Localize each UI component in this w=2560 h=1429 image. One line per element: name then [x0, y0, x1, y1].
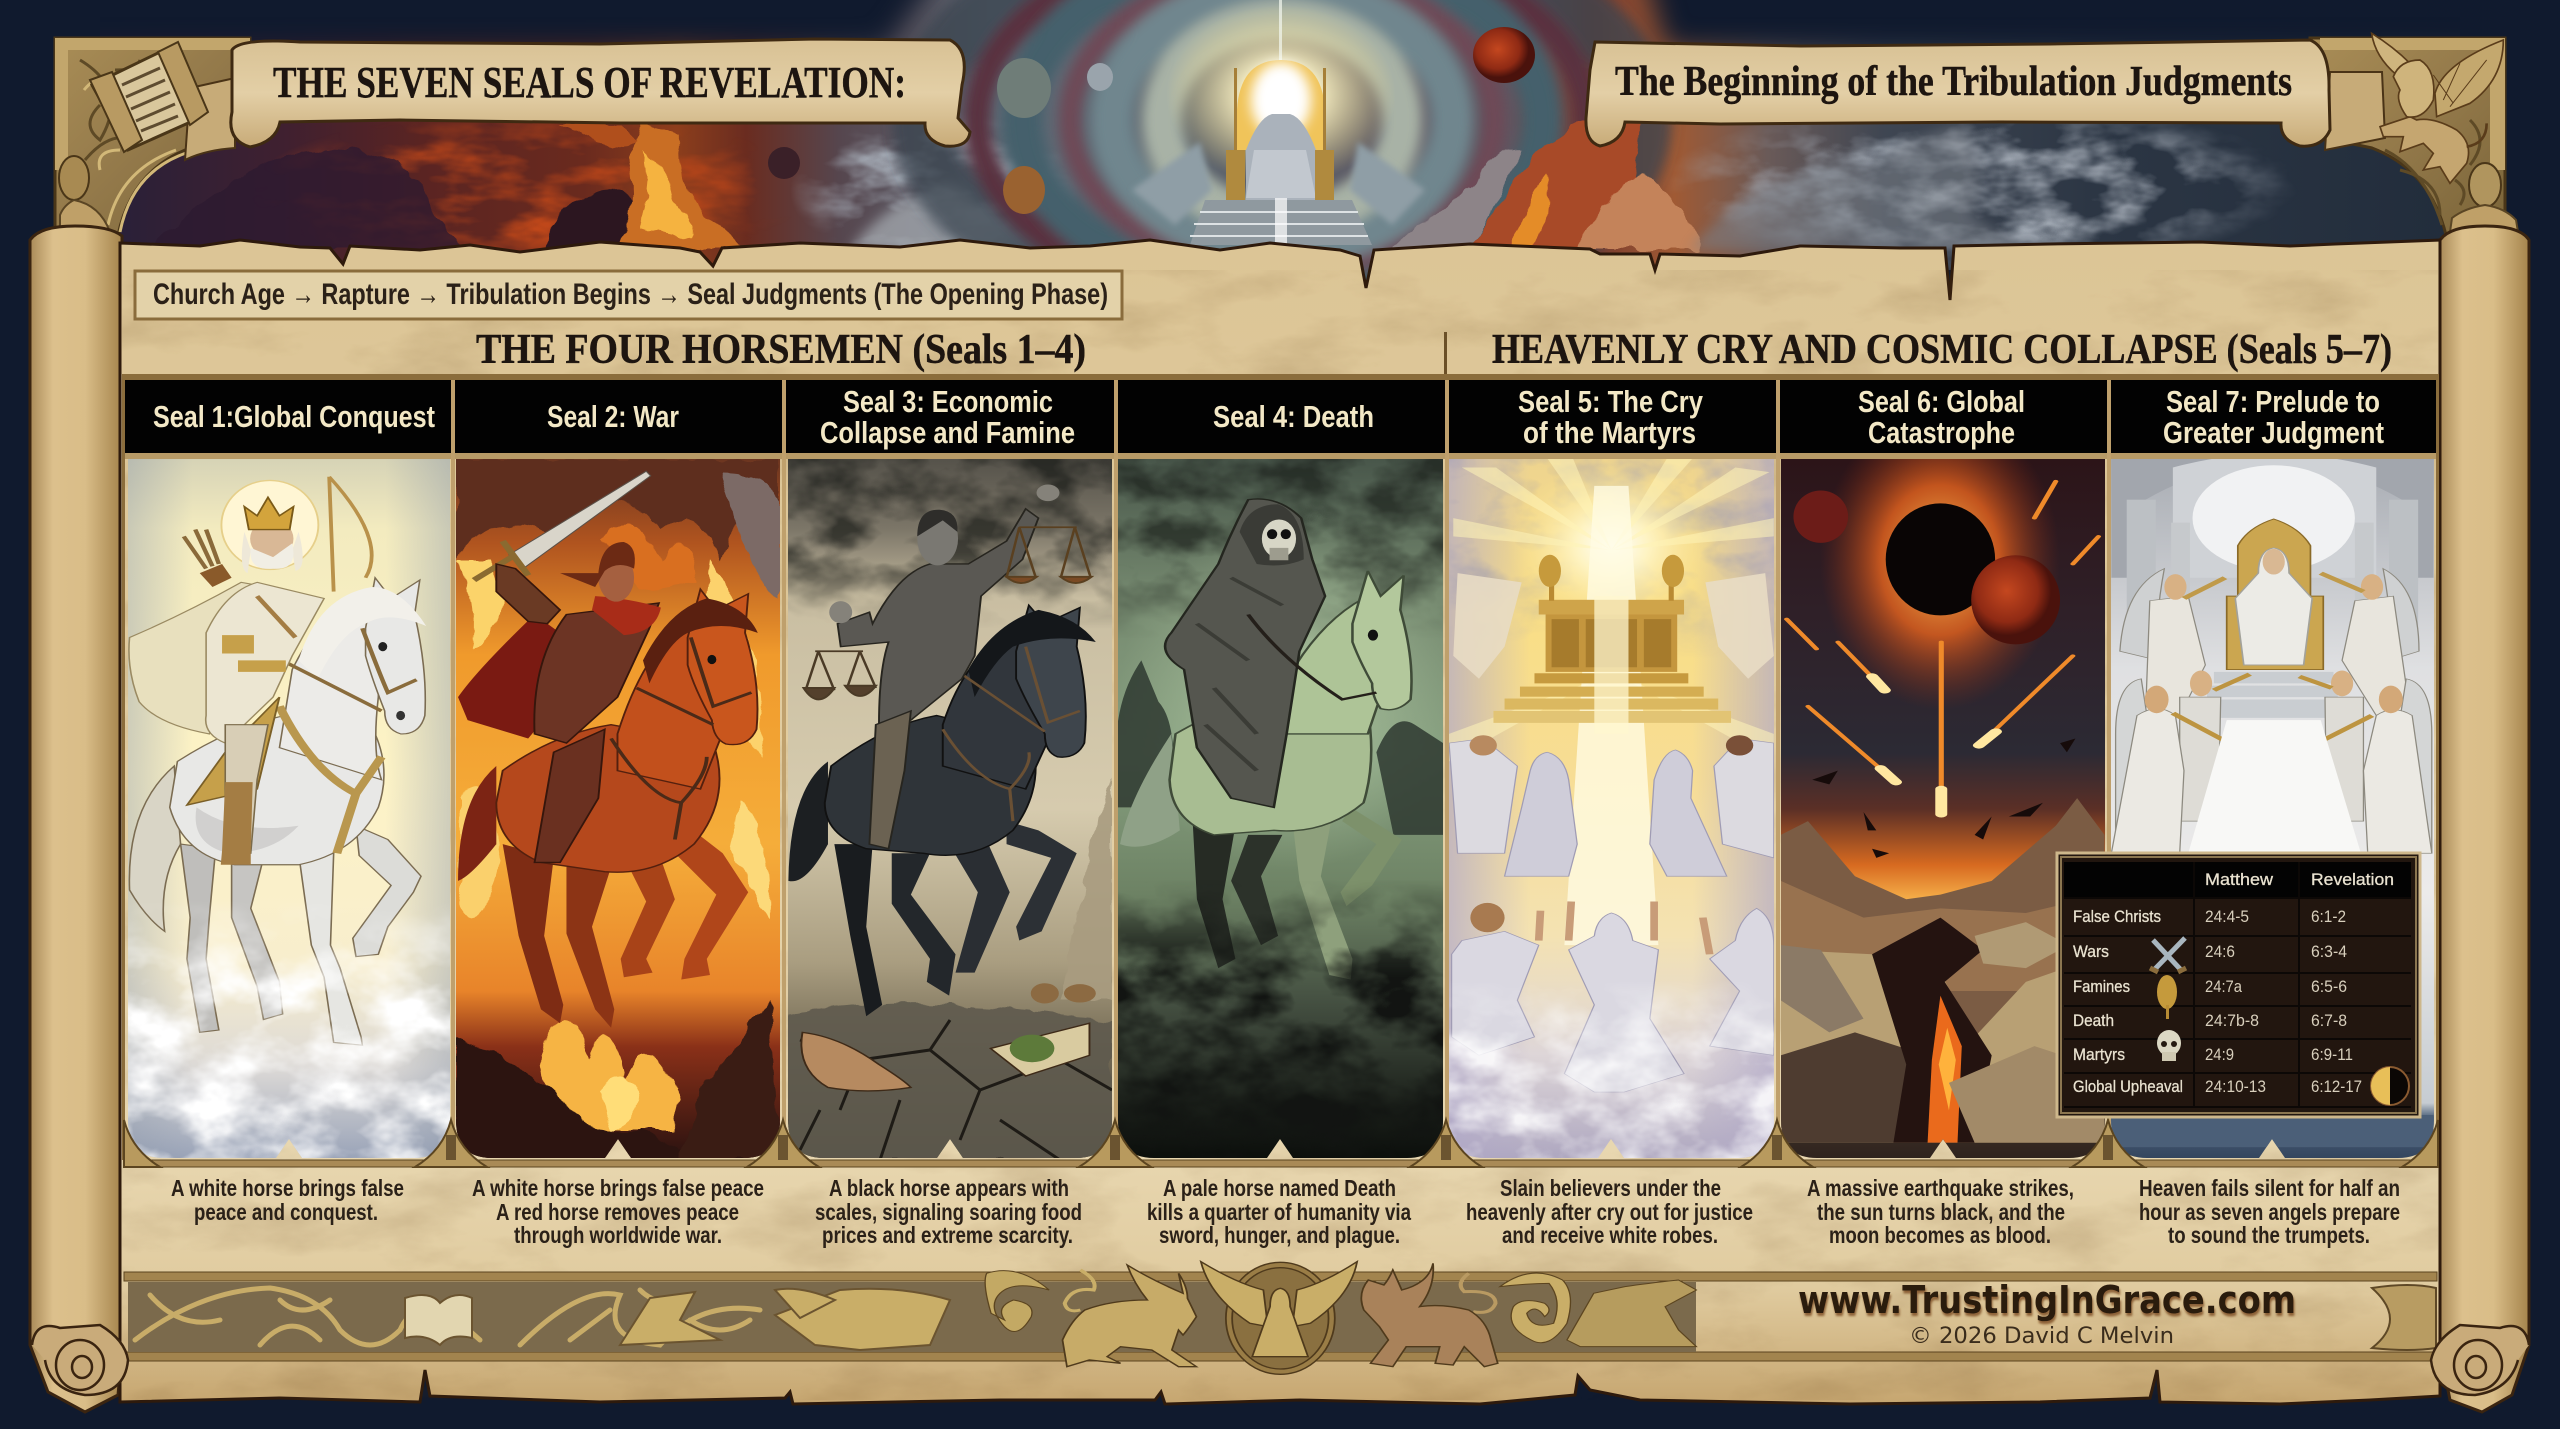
- caption: seal 3: A black horse appears with: [829, 1175, 1069, 1201]
- caption: seal 2: A white horse brings false peace: [472, 1175, 764, 1201]
- column heading: seal 5: Seal 5: The Cry: [1518, 384, 1704, 419]
- copyright: © 2026 David C Melvin: [1909, 1324, 2174, 1349]
- caption: seal 6: the sun turns black, and the: [1817, 1199, 2065, 1225]
- rider with cape and crown: [129, 582, 267, 734]
- caption: seal 7: hour as seven angels prepare: [2139, 1199, 2400, 1225]
- row: global upheaval: Global Upheaval: [2073, 1077, 2183, 1096]
- quiver and arrows: [200, 564, 232, 587]
- row: death: 24:7b-8: [2205, 1011, 2259, 1030]
- column heading: seal 1: Seal 1:Global Conquest: [153, 399, 435, 434]
- balance scales right: [1007, 527, 1091, 583]
- left scroll roller: [30, 226, 122, 1412]
- icon: winged lion: [2372, 33, 2503, 183]
- panel: seal 4 pale horse: [1116, 459, 1460, 1160]
- parchment sheet: [120, 240, 2440, 1404]
- arches and columns: [2111, 458, 2434, 578]
- panel: seal 1 white horse: [128, 459, 450, 1160]
- caption: seal 1: peace and conquest.: [194, 1199, 378, 1225]
- left scroll curl: [32, 1325, 128, 1395]
- white horse: [129, 578, 426, 1045]
- pale horse: [1120, 734, 1180, 847]
- banner tail right: [2325, 72, 2385, 150]
- column heading: seal 6: Seal 6: Global: [1858, 384, 2025, 419]
- caption: seal 2: through worldwide war.: [514, 1222, 722, 1248]
- finial left: [59, 156, 110, 232]
- icon: crossed swords: [2150, 938, 2186, 972]
- phase timeline box: [135, 271, 1122, 319]
- panel: seal 2 red horse: [456, 459, 780, 1160]
- column heading: seal 5: of the Martyrs: [1523, 415, 1696, 450]
- shadow crowd: [1116, 660, 1443, 835]
- lion statue right: [1361, 1263, 1498, 1367]
- kneeling martyrs front row: [1452, 908, 1774, 1092]
- caption: seal 1: A white horse brings false: [171, 1175, 404, 1201]
- caption: seal 4: A pale horse named Death: [1163, 1175, 1396, 1201]
- grey clouds left: [794, 135, 1016, 246]
- central throne glow: [1174, 12, 1388, 177]
- steps: [2201, 672, 2344, 718]
- sun rays: [1449, 458, 1774, 761]
- column heading: seal 7: Seal 7: Prelude to: [2166, 384, 2380, 419]
- open book emblem: [405, 1295, 472, 1345]
- caption: seal 6: A massive earthquake strikes,: [1807, 1175, 2074, 1201]
- dark fog clouds: [1118, 880, 1443, 1160]
- big acanthus scrolls: [985, 1271, 1696, 1347]
- column heading: seal 3: Collapse and Famine: [820, 415, 1075, 450]
- right title banner: [1586, 40, 2330, 146]
- column heading: seal 4: Seal 4: Death: [1213, 399, 1374, 434]
- section divider: [1444, 332, 1447, 376]
- row: famines: [2073, 977, 2347, 996]
- spilled food on cracked ground: [801, 983, 1096, 1091]
- bow: [329, 477, 372, 592]
- light beam: [1564, 486, 1658, 945]
- heading: subtitle: The Beginning of the Tribulation Judgments: [1615, 59, 2292, 105]
- column heading: seal 3: [820, 384, 1075, 450]
- header sky scene: [120, 0, 2444, 280]
- caption: seal 5: and receive white robes.: [1502, 1222, 1718, 1248]
- storm clouds right: [1676, 124, 2284, 250]
- right scroll roller: [2440, 226, 2529, 1412]
- timeline text: Church Age → Rapture → Tribulation Begins → Seal Judgments (The Opening Phase): [153, 278, 1108, 311]
- right corner knotwork: [2372, 1285, 2436, 1350]
- caption: seal 7: Heaven fails silent for half an: [2139, 1175, 2400, 1201]
- caption: seal 6: [1807, 1175, 2074, 1248]
- fire clouds left: [289, 122, 754, 250]
- reaper robes and skull: [1165, 499, 1325, 807]
- caption: seal 3: prices and extreme scarcity.: [822, 1222, 1073, 1248]
- row: false christs: 24:4-5: [2205, 907, 2249, 926]
- red horse: [458, 766, 496, 881]
- halo: [221, 480, 318, 569]
- caption: seal 2: [472, 1175, 764, 1248]
- golden throne: [2227, 519, 2323, 670]
- icon: half sun half dark moon: [2371, 1067, 2409, 1105]
- small red moon: [1793, 491, 1848, 543]
- icon: skull: [2157, 1030, 2181, 1061]
- table header: Matthew: [2205, 870, 2274, 889]
- caption: seal 3: scales, signaling soaring food: [815, 1199, 1082, 1225]
- website url: www.TrustingInGrace.com: [1798, 1278, 2296, 1322]
- bottom ornamental band: [124, 1262, 2437, 1374]
- bottom arch trim: [124, 1120, 2438, 1167]
- row: false christs: 6:1-2: [2311, 907, 2346, 926]
- lower nebula: [2111, 1115, 2434, 1147]
- table header: [2205, 870, 2394, 889]
- caption: seal 7: [2139, 1175, 2400, 1248]
- row: famines: 24:7a: [2205, 977, 2242, 996]
- throne and seated figure: [1132, 60, 1425, 248]
- banner tail left: [185, 78, 235, 160]
- balance scales left: [804, 651, 876, 699]
- caption: seal 5: heavenly after cry out for justice: [1466, 1199, 1753, 1225]
- heading: main title: THE SEVEN SEALS OF REVELATION:: [273, 58, 906, 107]
- enthroned figure: [2235, 548, 2312, 665]
- section heading: heavenly cry: HEAVENLY CRY AND COSMIC COLLAPSE (Seals 5–7): [1492, 327, 2392, 373]
- column heading: seal 6: [1858, 384, 2025, 450]
- planets: [768, 27, 1535, 214]
- table header: Revelation: [2311, 870, 2394, 889]
- caption: seal 2: A red horse removes peace: [496, 1199, 739, 1225]
- row: death: Death: [2073, 1011, 2114, 1030]
- cosmic swirl: [922, 0, 1642, 310]
- caption: seal 4: sword, hunger, and plague.: [1159, 1222, 1400, 1248]
- black horse: [788, 761, 828, 881]
- golden wing flourishes: [620, 1289, 950, 1350]
- mountains and fissure: [1781, 798, 2104, 1143]
- right scroll curl: [2431, 1325, 2529, 1395]
- column heading: seal 5: [1518, 384, 1704, 450]
- golden altar: [1493, 555, 1731, 723]
- left title banner: [231, 39, 970, 147]
- eclipsed black sun: [1886, 503, 1995, 615]
- clouds: [128, 900, 450, 1160]
- row: wars: Wars: [2073, 942, 2109, 961]
- gold scrollwork: [135, 1288, 760, 1345]
- caption: seal 4: [1147, 1175, 1411, 1248]
- column heading: seal 7: [2163, 384, 2384, 450]
- kneeling martyrs middle row: [1449, 738, 1774, 876]
- debris and birds: [1812, 738, 2075, 858]
- panel: seal 6 global catastrophe: [1781, 410, 2105, 1159]
- panel: seal 5 martyrs under the altar: [1449, 458, 1774, 1160]
- sword: [474, 471, 651, 580]
- column heading: seal 6: Catastrophe: [1868, 415, 2015, 450]
- clouds: [1449, 980, 1774, 1160]
- row: false christs: [2073, 907, 2346, 926]
- spandrel ornaments: [124, 1120, 2438, 1167]
- frame right corner: [2310, 38, 2518, 235]
- panel: seal 7 prelude: [2111, 454, 2434, 1159]
- finial right: [2450, 163, 2518, 232]
- winged medallion: [1201, 1262, 1357, 1374]
- row: global upheaval: 24:10-13: [2205, 1077, 2266, 1096]
- icon: wheat: [2157, 975, 2177, 1019]
- section heading: four horsemen: THE FOUR HORSEMEN (Seals 1–4): [476, 327, 1086, 373]
- caption: seal 3: [815, 1175, 1082, 1248]
- row: false christs: False Christs: [2073, 907, 2161, 926]
- lower angels: [2111, 679, 2432, 853]
- red rider with cape: [458, 614, 560, 738]
- column heading: seal 2: Seal 2: War: [547, 399, 679, 434]
- column heading: seal 7: Greater Judgment: [2163, 415, 2384, 450]
- upper angels: [2120, 569, 2419, 716]
- row: global upheaval: [2073, 1077, 2362, 1096]
- row: martyrs: 24:9: [2205, 1045, 2234, 1064]
- row: wars: [2073, 942, 2347, 961]
- frame left corner: [55, 38, 250, 235]
- row: martyrs: Martyrs: [2073, 1045, 2125, 1064]
- falling meteors: [1787, 481, 2099, 814]
- caption: seal 7: to sound the trumpets.: [2168, 1222, 2370, 1248]
- angels beside altar: [1453, 573, 1774, 679]
- lion statue left: [1062, 1265, 1196, 1367]
- row: death: [2073, 1011, 2347, 1030]
- radiant floor: [2188, 720, 2361, 853]
- row: global upheaval: 6:12-17: [2311, 1077, 2362, 1096]
- right flame clouds: [1390, 123, 1700, 250]
- icon: open scroll book: [90, 42, 208, 152]
- column heading: seal 3: Seal 3: Economic: [843, 384, 1053, 419]
- seal table frame: [122, 374, 2439, 1160]
- row: famines: 6:5-6: [2311, 977, 2347, 996]
- grey rider with scales: [838, 509, 1038, 725]
- row: death: 6:7-8: [2311, 1011, 2347, 1030]
- row: wars: 6:3-4: [2311, 942, 2347, 961]
- row: martyrs: [2073, 1045, 2353, 1064]
- row: martyrs: 6:9-11: [2311, 1045, 2353, 1064]
- caption: seal 6: moon becomes as blood.: [1829, 1222, 2051, 1248]
- caption: seal 4: kills a quarter of humanity via: [1147, 1199, 1411, 1225]
- caption: seal 5: Slain believers under the: [1500, 1175, 1721, 1201]
- cross-reference table: [2057, 853, 2420, 1117]
- caption: seal 5: [1466, 1175, 1753, 1248]
- row: wars: 24:6: [2205, 942, 2235, 961]
- caption: seal 1: [171, 1175, 404, 1225]
- row: famines: Famines: [2073, 977, 2130, 996]
- parchment texture: [122, 270, 2438, 1400]
- panel: seal 3 black horse: [788, 459, 1112, 1160]
- blood moon: [1971, 555, 2060, 644]
